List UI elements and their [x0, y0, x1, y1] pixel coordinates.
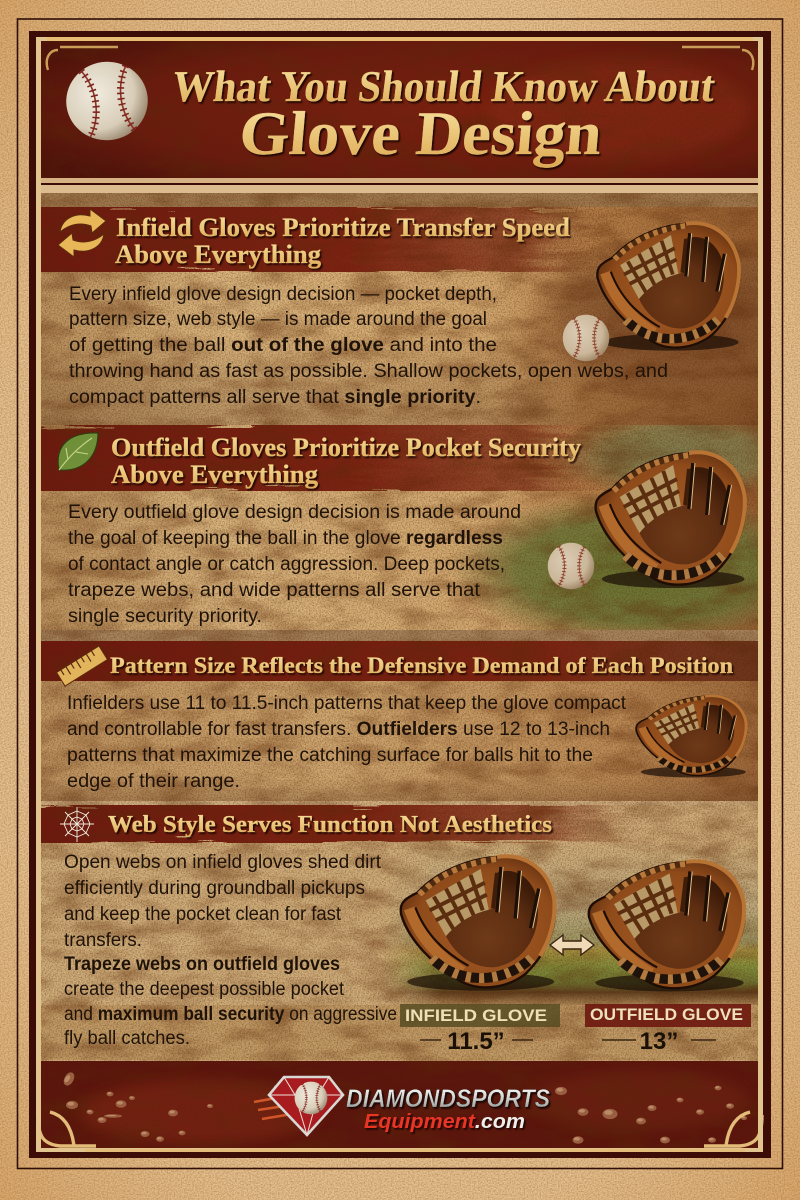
body text: and controllable for fast transfers. Outfielders use 12 to 13-inch: [67, 719, 610, 740]
heading: [115, 213, 571, 269]
icon: outfield glove: [596, 452, 745, 588]
icon: transfer arrows: [58, 209, 106, 257]
title: [170, 62, 718, 168]
heading: Infield Gloves Prioritize Transfer Speed: [116, 213, 571, 242]
heading: Web Style Serves Function Not Aesthetics: [108, 812, 552, 838]
icon: leaf: [58, 433, 98, 470]
body text: trapeze webs, and wide patterns all serve that: [68, 580, 481, 601]
body text: transfers.: [64, 930, 142, 951]
footer gold rule: [85, 1149, 745, 1152]
label: infield glove: [400, 1004, 560, 1027]
body text: [67, 693, 627, 792]
measurement: 13 inches: [602, 1028, 716, 1055]
corner ornaments: [47, 47, 753, 70]
label: outfield glove: [585, 1004, 751, 1027]
title: Glove Design: [237, 100, 605, 168]
section heading banner: [41, 805, 647, 843]
body text: create the deepest possible pocket: [64, 979, 345, 1000]
arrow: size comparison: [550, 935, 594, 955]
measurement: 11.5 inches: 11.5”: [447, 1028, 505, 1055]
panel: footer: [38, 1061, 763, 1158]
label: outfield glove: OUTFIELD GLOVE: [590, 1006, 743, 1024]
body text: single security priority.: [68, 606, 262, 627]
icon: diamond with baseball: [254, 1077, 343, 1135]
body text: Trapeze webs on outfield gloves: [64, 954, 340, 975]
measurement: 11.5 inches: [420, 1028, 533, 1055]
brand name: [346, 1085, 550, 1133]
body text: Open webs on infield gloves shed dirt: [64, 852, 382, 873]
icon: ball: [563, 315, 609, 361]
heading: Above Everything: [111, 460, 318, 489]
body text: and maximum ball security on aggressive: [64, 1004, 397, 1025]
title: What You Should Know About: [170, 62, 718, 111]
panel: outfield gloves: [41, 425, 758, 641]
body text: compact patterns all serve that single priority .: [69, 387, 481, 408]
body text: efficiently during groundball pickups: [64, 878, 365, 899]
body text: edge of their range.: [67, 771, 240, 792]
body text: patterns that maximize the catching surface for balls hit to the: [67, 745, 593, 766]
icon: pattern glove: [636, 696, 747, 777]
pebbles: [62, 1070, 747, 1144]
icon: baseball: [61, 57, 153, 145]
section heading banner: [41, 425, 612, 491]
corner ornament right: [704, 1112, 762, 1146]
icon: ruler: [57, 646, 107, 686]
panel: pattern size: [41, 641, 758, 805]
corner ornament left: [38, 1112, 96, 1146]
heading: [111, 433, 581, 489]
label: infield glove: INFIELD GLOVE: [405, 1007, 547, 1025]
icon: infield comparison glove: [401, 856, 555, 991]
body text: fly ball catches.: [64, 1028, 190, 1049]
body text: the goal of keeping the ball in the glove regardless: [68, 528, 503, 549]
panel: header: [41, 37, 758, 193]
icon: outfield comparison glove: [589, 861, 745, 991]
brand name: Equipment .com: [364, 1111, 525, 1133]
panel: infield gloves: [10, 193, 800, 425]
brand name: DIAMONDSPORTS: [346, 1085, 550, 1113]
body text: throwing hand as fast as possible. Shallow pockets, open webs, and: [69, 361, 668, 382]
body text: pattern size, web style — is made around the goal: [69, 309, 487, 330]
body text: Every infield glove design decision — pocket depth,: [69, 284, 497, 305]
body text: and keep the pocket clean for fast: [64, 904, 342, 925]
body text: [69, 284, 668, 408]
body text: Infielders use 11 to 11.5-inch patterns that keep the glove compact: [67, 693, 627, 714]
icon: ball: [548, 543, 594, 589]
body text: Every outfield glove design decision is made around: [68, 502, 521, 523]
section heading banner: [41, 641, 758, 681]
icon: spider web: [60, 807, 94, 842]
panel: web style: [10, 798, 758, 1061]
section heading banner: [41, 207, 606, 272]
heading: Pattern Size Reflects the Defensive Demand of Each Position: [110, 653, 733, 678]
icon: infield glove: [597, 223, 739, 351]
body text: [64, 852, 397, 1049]
logo: Diamond Sports Equipment: [254, 1077, 550, 1135]
measurement: 13 inches: 13”: [640, 1028, 678, 1055]
body text: [68, 502, 521, 627]
body text: of getting the ball out of the glove and into the: [69, 335, 497, 356]
heading: Above Everything: [115, 240, 321, 269]
heading: Outfield Gloves Prioritize Pocket Security: [111, 433, 581, 462]
body text: of contact angle or catch aggression. Deep pockets,: [68, 554, 505, 575]
header gold rule: [47, 37, 753, 41]
